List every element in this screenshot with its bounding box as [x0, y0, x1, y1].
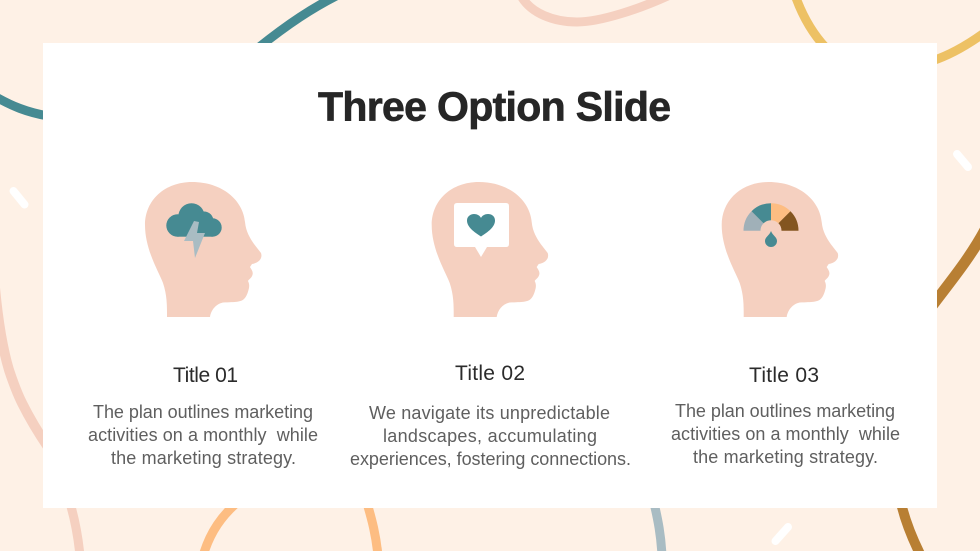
text: description 3: the marketing strategy.	[693, 447, 878, 467]
text: description 1	[88, 402, 318, 468]
option 3	[671, 182, 900, 467]
text: description 3	[671, 401, 900, 467]
text: description 3: activities on a monthly while	[671, 424, 900, 444]
text: description 2: We navigate its unpredictable	[369, 403, 610, 423]
heading: Title 02: Title 02	[455, 362, 525, 385]
text: description 2: experiences, fostering connections.	[350, 449, 631, 469]
text: description 1: activities on a monthly while	[88, 425, 318, 445]
icon: head with gauge and drop	[722, 182, 838, 317]
panel: white card	[43, 43, 937, 508]
icon: head with storm cloud	[145, 182, 261, 317]
icon: head with heart speech bubble	[432, 182, 548, 317]
text: description 1: The plan outlines marketing	[93, 402, 313, 422]
title: Three Option Slide	[318, 84, 671, 130]
heading: Title 01: Title 01	[173, 364, 238, 387]
text: description 3: The plan outlines marketing	[675, 401, 895, 421]
option 1	[88, 182, 318, 468]
text: description 2	[350, 403, 631, 469]
text: description 1: the marketing strategy.	[111, 448, 296, 468]
text: description 2: landscapes, accumulating	[383, 426, 597, 446]
option 2	[350, 182, 631, 469]
heading: Title 03: Title 03	[749, 364, 819, 387]
